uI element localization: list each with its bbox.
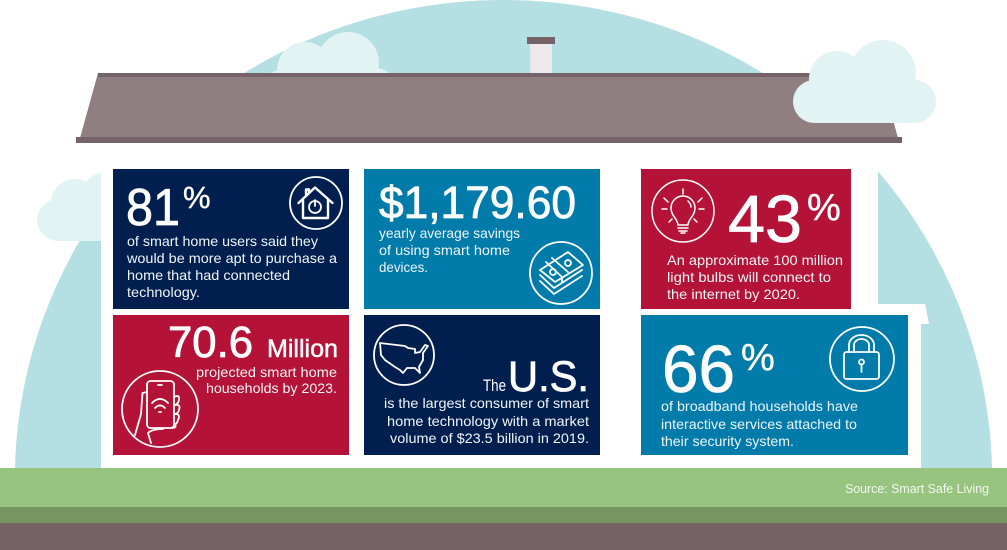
text: security description bbox=[661, 398, 858, 449]
icon: smart home power bbox=[290, 177, 342, 229]
text: 81% description: home that had connected bbox=[127, 267, 290, 283]
icon: map of the USA bbox=[374, 325, 434, 385]
icon: hand holding phone bbox=[122, 371, 198, 447]
stat: percent sign: % bbox=[807, 187, 841, 229]
ground: grass and soil bbox=[0, 468, 1007, 550]
text: light bulbs description: light bulbs will connect to bbox=[667, 269, 831, 285]
stat: 43: 43 bbox=[728, 182, 802, 257]
text: savings description: of using smart home bbox=[379, 242, 510, 258]
panel: 43% light bulbs bbox=[641, 169, 851, 309]
text: light bulbs description bbox=[667, 252, 843, 302]
cloud behind roof bbox=[270, 32, 390, 98]
text: 81% description: technology. bbox=[127, 284, 200, 300]
panel: the U.S. bbox=[364, 315, 600, 455]
icon: padlock bbox=[830, 327, 894, 391]
text: 81% description: of smart home users said they bbox=[127, 233, 318, 249]
text: U.S. description bbox=[384, 395, 589, 446]
house wall bbox=[101, 143, 929, 468]
text: 81% description: would be more apt to purchase a bbox=[126, 250, 337, 266]
text: light bulbs description: the internet by 2020. bbox=[667, 286, 800, 302]
stat: $1,179.60: $1,179.60 bbox=[379, 177, 576, 228]
chimney bbox=[527, 37, 555, 74]
panel: $1,179.60 savings bbox=[364, 169, 600, 309]
text: households description: households by 2023. bbox=[206, 380, 337, 396]
stat: percent sign: % bbox=[741, 337, 775, 379]
stat: Million: Million bbox=[267, 335, 338, 363]
stat: 66: 66 bbox=[662, 332, 735, 407]
text: households description bbox=[196, 364, 337, 396]
text: security description: interactive services attached to bbox=[661, 416, 857, 432]
roof bbox=[76, 73, 902, 143]
text: security description: their security system. bbox=[661, 433, 794, 449]
text: The: The bbox=[483, 376, 506, 395]
icon: stack of money bbox=[530, 242, 592, 304]
stat: U.S.: U.S. bbox=[508, 353, 589, 401]
text: 81% description bbox=[126, 233, 337, 300]
text: savings description: yearly average savings bbox=[379, 225, 520, 241]
text: savings description bbox=[379, 225, 520, 275]
source credit: Source: Smart Safe Living bbox=[845, 482, 989, 496]
text: U.S. description: is the largest consumer of smart bbox=[384, 395, 589, 411]
text: security description: of broadband households have bbox=[661, 398, 858, 414]
icon: light bulb bbox=[652, 180, 714, 242]
stat: percent sign: % bbox=[183, 180, 211, 215]
cloud over roof bbox=[793, 40, 936, 123]
text: households description: projected smart home bbox=[196, 364, 337, 380]
cloud at left of house bbox=[37, 172, 138, 241]
stat: 70.6: 70.6 bbox=[168, 318, 253, 367]
text: light bulbs description: An approximate 100 million bbox=[667, 252, 843, 268]
panel: 70.6 million households bbox=[113, 315, 349, 455]
stat: 81: 81 bbox=[126, 179, 180, 237]
panel: 81% smart home users bbox=[113, 169, 349, 309]
text: U.S. description: volume of $23.5 billion in 2019. bbox=[390, 430, 589, 446]
panel: 66% security bbox=[641, 315, 908, 455]
text: savings description: devices. bbox=[379, 259, 428, 275]
text: U.S. description: home technology with a market bbox=[387, 413, 589, 429]
